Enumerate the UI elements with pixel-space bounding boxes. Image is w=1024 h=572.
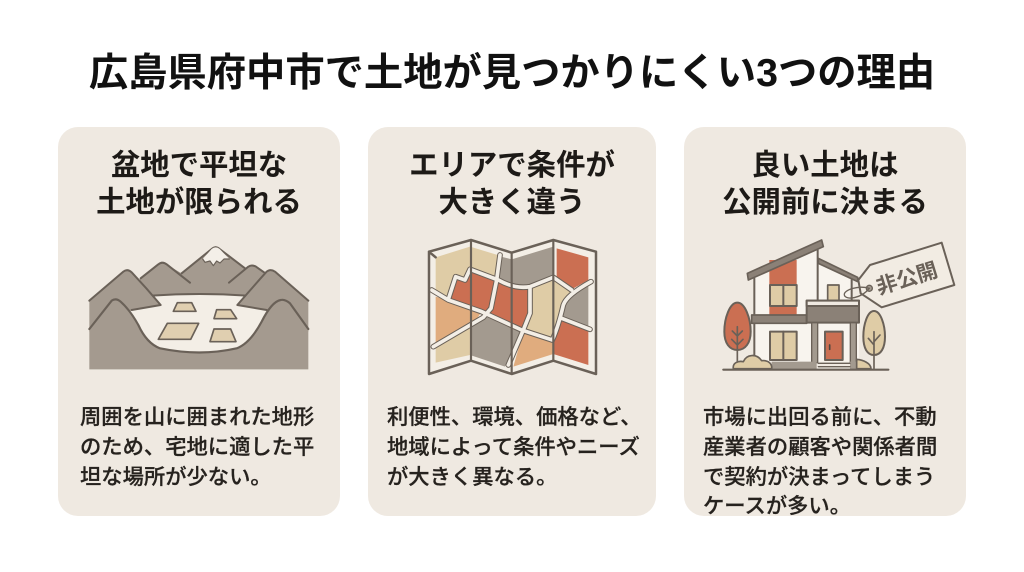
tag text: 非公開 [874,259,941,299]
heading: private listing [722,149,928,219]
text: area map: が大きく異なる。 [387,465,557,489]
text: private listing: ケースが多い。 [703,494,851,518]
panel: area map [368,127,656,516]
heading: area map: 大きく違う [439,186,585,219]
heading: area map [409,149,615,219]
text: area map [387,405,642,489]
text: area map: 利便性、環境、価格など、 [387,405,642,429]
heading: private listing: 良い土地は [752,149,898,182]
heading: area map: エリアで条件が [409,149,615,182]
text: private listing: 市場に出回る前に、不動 [703,405,937,429]
text: basin: 坦な場所が少ない。 [80,465,272,489]
panel: private listing [684,127,966,516]
panel: basin [58,127,340,516]
text: private listing: で契約が決まってしまう [703,465,935,489]
heading: basin: 盆地で平坦な [111,149,287,182]
text: basin [80,405,314,489]
text: area map: 地域によって条件やニーズ [387,435,640,459]
text: basin: のため、宅地に適した平 [80,435,314,459]
heading: basin [96,149,302,219]
text: basin: 周囲を山に囲まれた地形 [80,405,314,429]
text: private listing [703,405,937,518]
title: 広島県府中市で土地が見つかりにくい3つの理由 [89,51,935,95]
text: private listing: 産業者の顧客や関係者間 [703,435,937,459]
heading: basin: 土地が限られる [96,186,302,219]
heading: private listing: 公開前に決まる [722,186,928,219]
